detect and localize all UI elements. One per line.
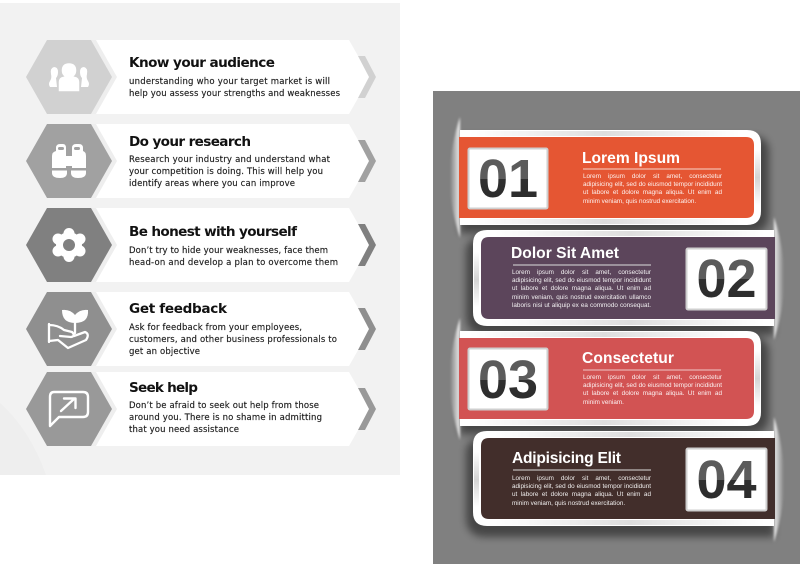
heading and text xyxy=(511,245,651,313)
heading and text: customers, and other business professionals to xyxy=(129,335,337,345)
heading and text: understanding who your target market is will xyxy=(129,77,330,87)
heading and text: Consectetur xyxy=(582,350,674,367)
heading and text: Get feedback xyxy=(129,301,228,317)
heading and text: adipisicing elit, sed do eiusmod tempor incididunt xyxy=(583,382,722,389)
heading and text: get an objective xyxy=(129,347,200,357)
heading and text xyxy=(129,301,337,357)
chevron xyxy=(358,308,376,350)
card 04 xyxy=(473,431,775,526)
card 01 xyxy=(459,130,761,225)
number box 02: 02 xyxy=(696,249,757,309)
heading and text: Lorem ipsum dolor sit amet, consectetur xyxy=(512,269,651,276)
row: do your research xyxy=(26,124,376,198)
heading and text: adipisicing elit, sed do eiusmod tempor incididunt xyxy=(512,277,651,284)
row: get feedback xyxy=(26,292,376,366)
heading and text xyxy=(582,350,722,410)
heading and text: ut labore et dolore magna aliqua. Ut enim ad xyxy=(583,390,722,397)
hexagon with binoculars icon xyxy=(26,124,112,198)
heading and text xyxy=(129,224,338,268)
heading and text: Research your industry and understand what xyxy=(129,155,331,165)
heading and text: ut labore et dolore magna aliqua. Ut enim ad xyxy=(512,285,651,292)
heading and text: that you need assistance xyxy=(129,425,239,435)
row: seek help xyxy=(26,372,376,446)
heading and text: Lorem ipsum dolor sit amet, consectetur xyxy=(583,173,722,180)
hexagon with people icon xyxy=(26,40,112,114)
chevron xyxy=(358,224,376,266)
heading and text: identify areas where you can improve xyxy=(129,179,295,189)
heading and text: Don’t try to hide your weaknesses, face them xyxy=(129,246,328,256)
heading and text xyxy=(129,55,341,99)
heading and text xyxy=(129,134,331,189)
row: know your audience xyxy=(26,40,376,114)
heading and text: ut labore et dolore magna aliqua. Ut enim ad xyxy=(583,189,722,196)
heading and text: Dolor Sit Amet xyxy=(511,245,619,262)
panel: numbered steps xyxy=(433,91,800,564)
hexagon with gear icon xyxy=(26,208,112,282)
heading and text: minim veniam, quis nostrud exercitation. xyxy=(583,198,696,205)
heading and text: Ask for feedback from your employees, xyxy=(129,323,302,333)
number box 03: 03 xyxy=(478,350,538,410)
heading and text: help you assess your strengths and weaknesses xyxy=(129,89,341,99)
card 03 xyxy=(459,331,761,426)
heading and text: around you. There is no shame in admitting xyxy=(129,413,322,423)
number box 04: 04 xyxy=(696,450,757,510)
heading and text: Be honest with yourself xyxy=(129,224,298,240)
heading and text xyxy=(512,450,651,511)
number box 01: 01 xyxy=(478,149,538,209)
chevron xyxy=(358,140,376,182)
heading and text xyxy=(129,380,322,435)
heading and text: your competition is doing. This will help you xyxy=(129,167,323,177)
hexagon with plant in hand icon xyxy=(26,292,112,366)
heading and text: Seek help xyxy=(129,380,198,396)
heading and text: Lorem ipsum dolor sit amet, consectetur xyxy=(583,374,722,381)
card 02 xyxy=(473,230,775,326)
panel: business self-assessment tips xyxy=(0,3,400,475)
heading and text: head-on and develop a plan to overcome them xyxy=(129,258,338,268)
hexagon with speech bubble icon xyxy=(26,372,112,446)
chevron xyxy=(358,56,376,98)
chevron xyxy=(358,388,376,430)
heading and text: Know your audience xyxy=(129,55,275,71)
heading and text: Lorem ipsum dolor sit amet, consectetur xyxy=(512,475,651,482)
heading and text: Adipisicing Elit xyxy=(512,450,621,467)
heading and text: adipisicing elit, sed do eiusmod tempor incididunt xyxy=(512,483,651,490)
row: be honest with yourself xyxy=(26,208,376,282)
heading and text: Do your research xyxy=(129,134,251,150)
heading and text: laboris nisi ut aliquip ex ea commodo consequat. xyxy=(512,302,651,309)
heading and text: Don’t be afraid to seek out help from those xyxy=(129,401,319,411)
heading and text: ut labore et dolore magna aliqua. Ut enim ad xyxy=(512,491,651,498)
heading and text: Lorem Ipsum xyxy=(582,150,680,167)
heading and text: minim veniam, quis nostrud exercitation. xyxy=(512,500,625,507)
heading and text: adipisicing elit, sed do eiusmod tempor incididunt xyxy=(583,181,722,188)
heading and text: minim veniam. xyxy=(583,399,624,406)
heading and text: minim veniam, quis nostrud exercitation ullamco xyxy=(512,294,651,301)
heading and text xyxy=(582,150,722,209)
